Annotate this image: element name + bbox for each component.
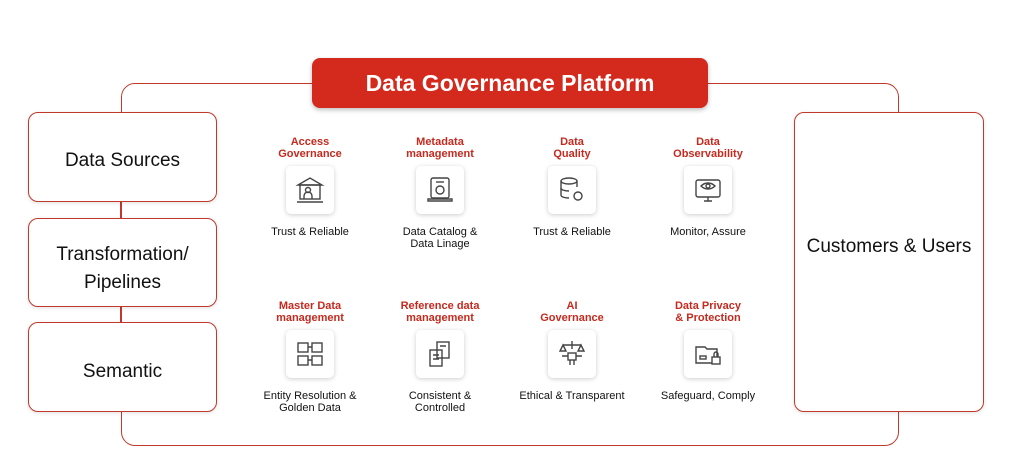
item: Access Governance: Access: [291, 136, 329, 148]
connector lines: [120, 202, 121, 218]
icon: folder lock: [684, 330, 732, 378]
platform frame: [121, 83, 899, 446]
title: [312, 58, 708, 108]
item: Data Privacy & Protection: [661, 300, 756, 402]
box: Data Sources: Data Sources: [65, 150, 180, 171]
icon: scales chip: [548, 330, 596, 378]
item: Data Observability: Monitor, Assure: [670, 226, 746, 238]
box: Data Sources: [28, 112, 217, 202]
icon: database gear: [548, 166, 596, 214]
item: Access Governance: [271, 136, 349, 238]
item: Master Data management: Golden Data: [279, 402, 341, 414]
icon: laptop gear: [416, 166, 464, 214]
box: Customers & Users: Customers & Users: [807, 236, 971, 257]
item: Data Privacy & Protection: Data Privacy: [675, 300, 741, 312]
item: Access Governance: Trust & Reliable: [271, 226, 349, 238]
item: Access Governance: Governance: [278, 148, 342, 160]
item: Metadata management: Data Catalog &: [403, 226, 477, 238]
item: AI Governance: AI: [566, 300, 578, 312]
item: Metadata management: Metadata: [416, 136, 464, 148]
item: Data Quality: [533, 136, 611, 238]
item: Data Privacy & Protection: & Protection: [675, 312, 741, 324]
icon: monitor eye: [684, 166, 732, 214]
item: Data Observability: Data: [696, 136, 720, 148]
item: AI Governance: Ethical & Transparent: [519, 390, 625, 402]
item: Master Data management: Entity Resolution &: [264, 390, 356, 402]
item: Reference data management: Controlled: [415, 402, 465, 414]
box: Transformation/Pipelines: Transformation/: [56, 244, 189, 264]
item: Reference data management: Consistent &: [409, 390, 471, 402]
item: AI Governance: [519, 300, 625, 402]
item: Master Data management: management: [276, 312, 344, 324]
icon: documents: [416, 330, 464, 378]
item: Reference data management: management: [406, 312, 474, 324]
box: Semantic: [28, 322, 217, 412]
item: Data Quality: Trust & Reliable: [533, 226, 611, 238]
item: Master Data management: [264, 300, 356, 414]
item: Metadata management: [403, 136, 478, 250]
title: Data Governance Platform: [366, 70, 654, 96]
item: AI Governance: Governance: [540, 312, 604, 324]
item: Data Observability: Observability: [673, 148, 743, 160]
item: Data Quality: Data: [560, 136, 584, 148]
icon: entity grid: [286, 330, 334, 378]
item: Data Quality: Quality: [553, 148, 591, 160]
item: Metadata management: Data Linage: [410, 238, 470, 250]
box: Transformation/Pipelines: [28, 218, 217, 307]
box: Customers & Users: [794, 112, 984, 412]
item: Master Data management: Master Data: [279, 300, 341, 312]
item: Reference data management: Reference data: [401, 300, 479, 312]
icon: building: [286, 166, 334, 214]
box: Transformation/Pipelines: Pipelines: [84, 272, 161, 292]
item: Data Observability: [670, 136, 746, 238]
item: Reference data management: [401, 300, 480, 414]
item: Metadata management: management: [406, 148, 474, 160]
box: Semantic: Semantic: [83, 360, 162, 382]
item: Data Privacy & Protection: Safeguard, Comply: [661, 390, 755, 402]
